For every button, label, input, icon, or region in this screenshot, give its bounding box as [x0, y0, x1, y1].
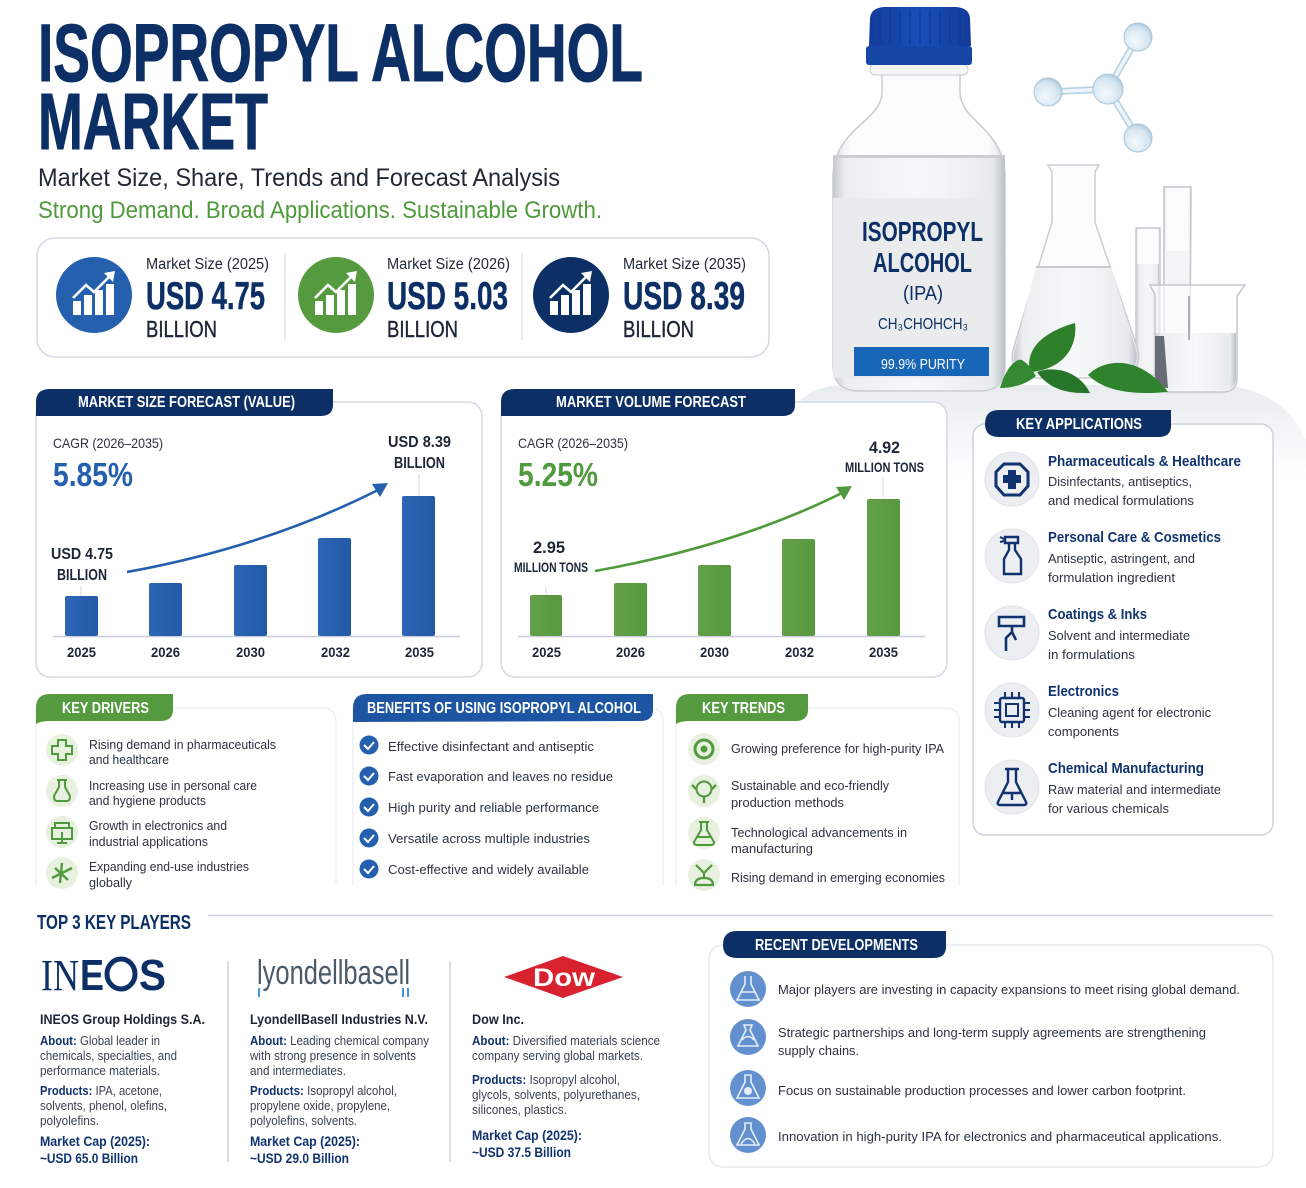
panel: market volume forecast [501, 389, 947, 677]
bar chart: USD 8.39 [388, 434, 451, 451]
application: pharmaceuticals: Pharmaceuticals & Healthcare [1048, 453, 1241, 470]
application: coatings: in formulations [1048, 647, 1136, 662]
company: Dow: About: Diversified materials science [472, 1034, 660, 1048]
logo: INEOS [41, 951, 166, 1000]
stat: 2035 [533, 256, 746, 342]
benefit 3: High purity and reliable performance [388, 800, 599, 815]
development 1: Major players are investing in capacity expansions to meet rising global demand. [778, 982, 1240, 997]
development 1 [730, 971, 1240, 1007]
company: Dow: Dow Inc. [472, 1011, 524, 1027]
application: pharmaceuticals [985, 452, 1241, 508]
driver 1 [46, 734, 276, 767]
leaves [1000, 323, 1168, 393]
bar chart: MILLION TONS [514, 560, 588, 575]
panel: key trends [676, 694, 959, 891]
development 4: Innovation in high-purity IPA for electronics and pharmaceutical applications. [778, 1129, 1222, 1144]
bottle label: (IPA) [903, 283, 943, 305]
driver 1: Rising demand in pharmaceuticals [89, 737, 276, 752]
benefit 4 [360, 828, 591, 848]
test tubes [1136, 187, 1191, 375]
trend 3: Technological advancements in [731, 825, 907, 840]
bar chart: 2026 [616, 644, 645, 660]
logo: INEOS: IN [41, 951, 79, 1000]
application: personal care: Antiseptic, astringent, and [1048, 551, 1195, 566]
driver 4: Expanding end-use industries [89, 859, 249, 874]
trend 4: Rising demand in emerging economies [731, 870, 945, 885]
application: chemical manufacturing: Chemical Manufacturing [1048, 760, 1204, 777]
application: electronics [985, 683, 1211, 739]
benefit 1 [360, 736, 595, 754]
driver 3: industrial applications [89, 834, 208, 849]
trend 1: Growing preference for high-purity IPA [731, 741, 944, 756]
company: INEOS: Products: IPA, acetone, [40, 1084, 162, 1098]
bottle cap [866, 7, 972, 65]
application: pharmaceuticals: and medical formulations [1048, 493, 1194, 508]
stat: 2026: BILLION [387, 316, 458, 342]
driver 1: and healthcare [89, 752, 169, 767]
bottle label [833, 198, 990, 378]
company: INEOS: ~USD 65.0 Billion [40, 1151, 138, 1166]
arrow [595, 486, 852, 571]
benefit 5: Cost-effective and widely available [388, 862, 589, 877]
company: LyondellBasell: polyolefins, solvents. [250, 1114, 357, 1128]
bar chart: 2032 [785, 644, 814, 660]
hero image: platform, bottle, glassware, molecule, leaves [800, 7, 1306, 480]
heading: top 3 key players: TOP 3 KEY PLAYERS [37, 912, 191, 934]
heading tab: RECENT DEVELOPMENTS [755, 937, 918, 954]
application: coatings: Coatings & Inks [1048, 606, 1147, 623]
heading tab [723, 931, 946, 958]
development 2: Strategic partnerships and long-term supply agreements are strengthening [778, 1025, 1206, 1040]
trend 2: production methods [731, 795, 844, 810]
driver 2: and hygiene products [89, 793, 206, 808]
company: LyondellBasell: LyondellBasell Industries N.V. [250, 1011, 428, 1027]
panel: benefits [353, 694, 663, 885]
bar chart: 2035 [405, 644, 434, 660]
bar chart: 2025 [67, 644, 96, 660]
bar chart: 2025 [532, 644, 561, 660]
panel: key applications [973, 410, 1273, 835]
company: LyondellBasell: and intermediates. [250, 1064, 346, 1078]
benefit 2: Fast evaporation and leaves no residue [388, 769, 613, 784]
company: INEOS: solvents, phenol, olefins, [40, 1099, 167, 1113]
trend 2: Sustainable and eco-friendly [731, 778, 889, 793]
CAGR: 5.85% [53, 456, 133, 493]
company: Dow: Market Cap (2025): [472, 1128, 582, 1143]
logo: INEOS: E [80, 951, 104, 1000]
company: LyondellBasell: Products: Isopropyl alcohol, [250, 1084, 397, 1098]
heading tab: MARKET SIZE FORECAST (VALUE) [78, 394, 295, 411]
application: chemical manufacturing: Raw material and intermediate [1048, 782, 1221, 797]
development 4 [730, 1117, 1222, 1153]
heading tab [353, 694, 653, 722]
bar chart [514, 438, 925, 660]
panel: key drivers [36, 694, 336, 890]
driver 4 [46, 857, 249, 890]
development 2: supply chains. [778, 1043, 859, 1058]
bar chart: BILLION [57, 567, 107, 584]
driver 2: Increasing use in personal care [89, 778, 257, 793]
company: INEOS: performance materials. [40, 1064, 160, 1078]
development 3: Focus on sustainable production processes and lower carbon footprint. [778, 1083, 1186, 1098]
logo: Dow: Dow [533, 964, 596, 992]
stat: 2025: BILLION [146, 316, 217, 342]
company: LyondellBasell: ~USD 29.0 Billion [250, 1151, 349, 1166]
bar chart: 2.95 [533, 538, 565, 557]
company: LyondellBasell: with strong presence in solvents [249, 1049, 416, 1063]
company: Dow: ~USD 37.5 Billion [472, 1145, 571, 1160]
title: MARKET [38, 77, 268, 166]
CAGR: 5.25% [518, 456, 598, 493]
driver 2 [46, 775, 257, 808]
heading tab [676, 694, 808, 724]
bottle label: ALCOHOL [873, 247, 972, 278]
bottle label: ISOPROPYL [862, 216, 983, 247]
development 3 [730, 1070, 1186, 1106]
bar chart: MILLION TONS [845, 460, 924, 475]
company: Dow: silicones, plastics. [472, 1103, 567, 1117]
bar chart: 2030 [236, 644, 265, 660]
company: INEOS [40, 1011, 205, 1166]
trend 3: manufacturing [731, 841, 813, 856]
arrow [127, 483, 388, 572]
heading tab: MARKET VOLUME FORECAST [556, 394, 746, 411]
logo: lyondellbasell: lyondellbasell [257, 954, 410, 992]
company: Dow [472, 1011, 660, 1160]
company: Dow: Products: Isopropyl alcohol, [472, 1073, 620, 1087]
bottle [833, 7, 1005, 391]
heading tab: KEY APPLICATIONS [1016, 416, 1142, 433]
trend 4 [688, 859, 945, 891]
heading tab: KEY TRENDS [702, 700, 785, 717]
divider [449, 961, 451, 1162]
application: electronics: components [1048, 724, 1119, 739]
bar chart: 2035 [869, 644, 898, 660]
trend 2 [688, 775, 889, 810]
stat: 2025 [56, 256, 269, 342]
beaker [1150, 285, 1245, 392]
heading tab [36, 694, 173, 724]
application: pharmaceuticals: Disinfectants, antiseptics, [1048, 474, 1192, 489]
stat: 2035: BILLION [623, 316, 694, 342]
panel: recent developments [709, 931, 1273, 1167]
subtitle: Market Size, Share, Trends and Forecast Analysis [38, 164, 560, 192]
driver 3 [46, 816, 227, 849]
stat: 2026: USD 5.03 [387, 275, 508, 318]
company: INEOS: About: Global leader in [40, 1034, 160, 1048]
application: chemical manufacturing: for various chemicals [1048, 801, 1169, 816]
CAGR: CAGR (2026–2035) [518, 435, 628, 451]
heading tab: KEY DRIVERS [62, 700, 149, 717]
bar chart [51, 434, 460, 660]
company: INEOS: chemicals, specialties, and [40, 1049, 177, 1063]
bar chart: 4.92 [869, 438, 900, 457]
benefit 3 [360, 798, 599, 816]
stat: 2026 [298, 256, 510, 342]
stat: 2026: Market Size (2026) [387, 256, 510, 273]
heading tab: BENEFITS OF USING ISOPROPYL ALCOHOL [367, 700, 641, 717]
company: LyondellBasell: Market Cap (2025): [250, 1134, 360, 1149]
molecule [1034, 23, 1152, 152]
panel: market size forecast [36, 389, 482, 677]
trend 3 [688, 817, 907, 856]
stat: 2035: Market Size (2035) [623, 256, 746, 273]
benefit 5 [360, 860, 589, 878]
bar chart: 2030 [700, 644, 729, 660]
bar chart: BILLION [394, 455, 445, 472]
application: electronics: Cleaning agent for electronic [1048, 705, 1211, 720]
company: INEOS: Market Cap (2025): [40, 1134, 150, 1149]
development 2 [730, 1019, 1206, 1058]
application: chemical manufacturing [985, 760, 1221, 816]
bar chart: USD 4.75 [51, 546, 113, 563]
market size summary card [37, 238, 769, 357]
stat: 2035: USD 8.39 [623, 275, 745, 318]
company: Dow: glycols, solvents, polyurethanes, [472, 1088, 640, 1102]
company: INEOS: polyolefins. [40, 1114, 99, 1128]
benefit 4: Versatile across multiple industries [388, 831, 591, 846]
benefit 1: Effective disinfectant and antiseptic [388, 739, 595, 754]
application: electronics: Electronics [1048, 683, 1119, 700]
company: LyondellBasell: propylene oxide, propylene, [250, 1099, 390, 1113]
trend 1 [688, 733, 944, 765]
benefit 2 [360, 766, 613, 786]
heading tab [501, 389, 795, 416]
bar chart: 2026 [151, 644, 180, 660]
title: ISOPROPYL ALCOHOL [38, 8, 643, 99]
stat: 2025: Market Size (2025) [146, 256, 269, 273]
company: LyondellBasell: About: Leading chemical company [250, 1034, 430, 1048]
divider [227, 961, 229, 1162]
platform [800, 385, 1306, 480]
stat: 2025: USD 4.75 [146, 275, 265, 318]
application: personal care [985, 529, 1221, 585]
CAGR: CAGR (2026–2035) [53, 435, 163, 451]
driver 4: globally [89, 875, 132, 890]
application: personal care: formulation ingredient [1048, 570, 1175, 585]
bar chart: 2032 [321, 644, 350, 660]
company: LyondellBasell [249, 1011, 430, 1166]
bottle label: CH₃CHOHCH₃ [878, 316, 968, 333]
company: Dow: company serving global markets. [472, 1049, 643, 1063]
application: coatings [985, 606, 1190, 662]
bottle label: 99.9% PURITY [881, 357, 965, 373]
title [38, 8, 643, 166]
flask [1012, 165, 1139, 378]
company: INEOS: INEOS Group Holdings S.A. [40, 1011, 205, 1027]
application: coatings: Solvent and intermediate [1048, 628, 1190, 643]
CAGR [53, 435, 163, 493]
tagline: Strong Demand. Broad Applications. Sustainable Growth. [38, 197, 602, 224]
driver 3: Growth in electronics and [89, 818, 227, 833]
heading tab [36, 389, 333, 416]
CAGR [518, 435, 628, 493]
logo: Dow [504, 956, 623, 998]
application: personal care: Personal Care & Cosmetics [1048, 529, 1221, 546]
heading tab [985, 410, 1171, 437]
logo: INEOS: S [139, 951, 166, 1000]
